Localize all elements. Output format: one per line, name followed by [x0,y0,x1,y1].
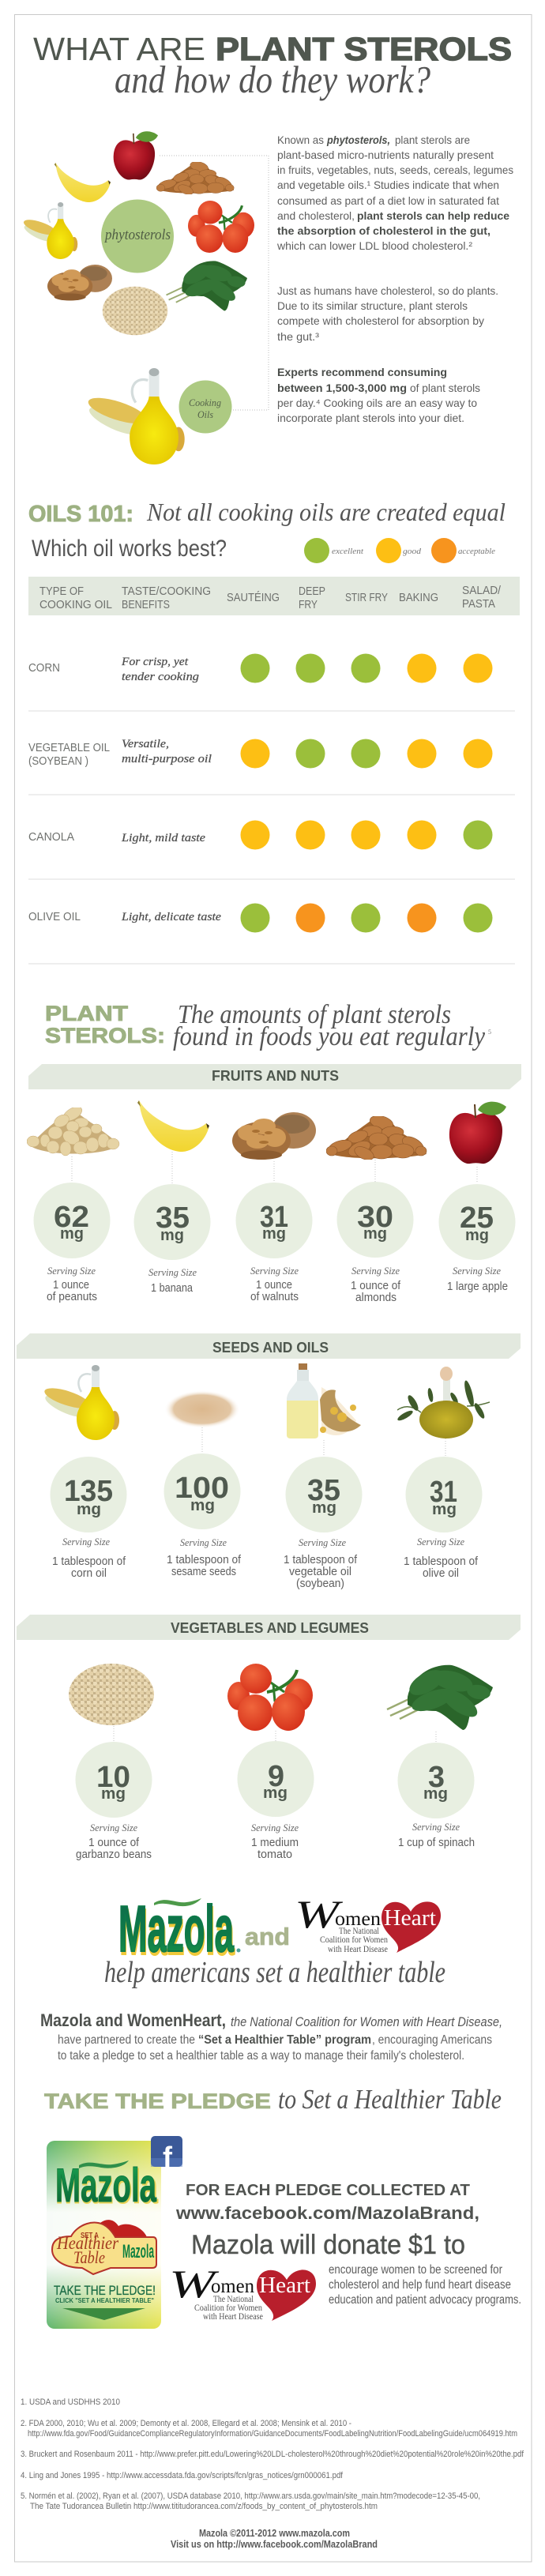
paragraph: definition [276,134,513,252]
legend: good [403,547,422,556]
heading: oils 101 [28,498,506,527]
illustration: phytosterol food sources [22,131,269,464]
item: vegetable oil: (soybean) [296,1577,344,1590]
paragraph: definition: plant-based micro-nutrients naturally present [277,149,494,161]
item: walnuts: 1 ounce [256,1278,292,1292]
title: WHAT ARE [33,31,205,67]
paragraph: definition: consumed as part of a diet low in saturated fat [277,194,499,207]
item: almonds: Serving Size [351,1265,400,1277]
heading: oils 101: OILS 101: [28,502,133,527]
heading: plant sterols amounts: 5 [488,1029,491,1036]
item: sesame seeds: Serving Size [180,1536,227,1548]
paragraph: how it works: Just as humans have cholesterol, so do plants. [277,284,498,297]
logo: WomenHeart second: W [169,2262,220,2306]
paragraph: recommendation: Experts recommend consuming [277,366,447,378]
phytosterols circle: phytosterols [103,227,171,243]
call to action: CLICK "SET A HEALTHIER TABLE" [55,2297,154,2304]
logo: WomenHeart second: The National [213,2293,254,2304]
item: walnuts: 31 [260,1201,288,1234]
text: and: and [245,1923,290,1950]
item: olive oil: Serving Size [417,1536,464,1547]
table header: SALAD/ [462,584,502,597]
icon: banana [137,1100,209,1152]
legend [304,538,495,563]
item: sesame seeds [164,1453,242,1578]
table header: BENEFITS [122,598,170,611]
paragraph: definition: and vegetable oils.¹ Studies indicate that when [277,179,499,191]
badge: set a healthier table: Healthier [56,2233,119,2253]
row: corn: For crisp, yet [121,656,189,668]
icon: apple [114,131,158,180]
text: partnership paragraph: , encouraging Americans [372,2033,492,2047]
footnotes: The Tate Tudorancea Bulletin http://www.tititudorancea.com/z/foods_by_content_of_phytosterols.htm [30,2502,378,2511]
heading: take the pledge: to Set a Healthier Table [278,2084,502,2115]
table header: SAUTÉING [227,591,280,604]
band: seeds and oils [17,1333,521,1359]
icon: chickpeas [103,287,167,335]
table header [28,577,520,615]
paragraph: definition: phytosterols, [326,134,390,146]
pledge text: FOR EACH PLEDGE COLLECTED AT [186,2182,470,2199]
logo: WomenHeart second [169,2262,316,2322]
item: tomato [237,1741,314,1861]
icon: apple [449,1102,506,1164]
logo: WomenHeart: omen [335,1908,382,1930]
icon: soybean oil [287,1363,361,1438]
item: sesame seeds: mg [190,1497,215,1514]
item: tomato: 9 [268,1760,284,1793]
item: spinach: Serving Size [412,1821,460,1833]
logo: Mazola: Mazola [119,1895,235,1969]
row: vegetable oil: multi-purpose oil [122,753,212,765]
heading: plant sterols amounts: The amounts of plant sterols [178,1000,451,1029]
item: corn oil: corn oil [71,1566,107,1580]
row: olive oil: OLIVE OIL [28,910,81,923]
paragraph: definition: Known as [277,134,324,146]
row: vegetable oil: Versatile, [122,738,169,750]
item: olive oil [404,1457,482,1580]
icon: peanuts [27,1104,119,1156]
icon: spinach [167,261,247,310]
heading: take the pledge: TAKE THE PLEDGE [44,2089,271,2113]
paragraph: definition: in fruits, vegetables, nuts, seeds, cereals, legumes [277,164,513,176]
icon: walnuts [47,265,112,300]
item: peanuts: mg [60,1225,84,1243]
text: partnership paragraph: “Set a Healthier Table” program [198,2033,371,2047]
paragraph: definition: plant sterols can help reduce [357,209,509,222]
footer [171,2527,378,2550]
band: fruits and nuts: FRUITS AND NUTS [212,1068,339,1084]
cooking oils circle [179,381,232,433]
heading: plant sterols amounts [45,1000,491,1051]
paragraph: how it works: Due to its similar structure, plant sterols [277,299,468,312]
footnotes: 2. FDA 2000, 2010; Wu et al. 2009; Demonty et al. 2008, Ellegard et al. 2008; Mensink et al. 2010 - [21,2419,351,2428]
row: olive oil [28,904,493,932]
table header: PASTA [462,597,495,611]
pledge text: www.facebook.com/MazolaBrand, [175,2203,479,2223]
row: corn [28,654,493,683]
item: almonds: 30 [357,1201,393,1234]
icon: almonds [156,160,234,197]
item: garbanzo beans: 10 [96,1761,130,1794]
table header: BAKING [399,591,438,604]
panel: seeds and oils [17,1333,521,1590]
logo: WomenHeart [295,1892,441,1954]
item: apple [439,1184,515,1293]
card: Mazola Facebook pledge [47,2136,182,2329]
item: apple: mg [465,1227,489,1244]
subheading: which oil works best: Which oil works best? [32,536,227,562]
item: vegetable oil: Serving Size [299,1536,346,1548]
row: canola: CANOLA [28,830,74,844]
footer: Mazola ©2011-2012 www.mazola.com [199,2527,350,2539]
item: spinach: 1 cup of spinach [398,1836,475,1849]
row: vegetable oil: VEGETABLE OIL [28,741,110,754]
icon: corn oil small [22,202,77,259]
logo: WomenHeart second: omen [211,2276,254,2297]
item: corn oil: 135 [64,1475,113,1508]
item: vegetable oil: mg [312,1499,336,1517]
icon: chickpeas [69,1664,154,1725]
item: tomato: 1 medium [251,1836,299,1849]
footnotes: 4. Ling and Jones 1995 - http://www.accessdata.fda.gov/scripts/fcn/gras_notices/grn000061.pdf [21,2471,344,2480]
item: vegetable oil: vegetable oil [289,1565,351,1578]
item: garbanzo beans: Serving Size [90,1822,137,1833]
text: donation purpose: cholesterol and help fund heart disease [329,2278,511,2292]
row: olive oil: Light, delicate taste [121,911,221,923]
row: corn: tender cooking [122,671,200,683]
logo: Mazola [118,1892,240,1969]
item: walnuts: Serving Size [250,1265,299,1277]
heading: plant sterols amounts: PLANT [45,1002,129,1025]
text: donation purpose [329,2263,521,2307]
badge: set a healthier table [52,2220,156,2274]
text: partnership paragraph [40,2010,502,2063]
logo: WomenHeart: The National [339,1925,380,1936]
title: PLANT STEROLS [216,31,512,67]
item: banana: mg [160,1227,184,1244]
row: corn: CORN [28,661,60,675]
title [33,31,512,101]
item: walnuts [235,1183,313,1303]
logo: Mazola small: Mazola [55,2160,158,2213]
heading: oils 101: Not all cooking oils are created equal [146,498,506,526]
table: cooking oils [28,577,520,964]
item: vegetable oil: 35 [307,1474,340,1507]
paragraph: how it works [277,284,498,343]
item: corn oil [51,1457,126,1580]
item: apple: 25 [460,1202,494,1235]
logo: WomenHeart: Coalition for Women [320,1934,388,1945]
item: banana: 35 [156,1202,190,1235]
heading: take the pledge [44,2084,502,2115]
table header: DEEP [299,585,325,598]
item: corn oil: Serving Size [62,1536,110,1547]
table header: STIR FRY [345,591,388,604]
panel: vegetables and legumes [17,1615,521,1861]
item: garbanzo beans [76,1742,152,1861]
row: canola: Light, mild taste [121,832,205,844]
icon: corn oil [43,1365,119,1440]
item: peanuts [33,1183,111,1303]
item: olive oil: mg [432,1501,457,1518]
logo: Mazola small: Mazola [55,2159,156,2212]
item: corn oil: mg [77,1501,101,1518]
paragraph: how it works: the gut.³ [277,330,319,343]
item: peanuts: 1 ounce [53,1278,89,1292]
logo: Mazola: Mazola [118,1892,234,1965]
item: spinach [398,1743,475,1849]
badge: set a healthier table: Table [73,2247,105,2267]
paragraph: how it works: compete with cholesterol for absorption by [277,314,484,327]
item: vegetable oil [284,1457,362,1590]
text: donation purpose: encourage women to be screened for [329,2263,502,2277]
item: tomato: mg [263,1784,288,1802]
icon: walnuts [232,1112,316,1160]
row: canola [28,820,493,850]
cooking oils circle: Cooking [189,397,221,408]
icon: banana [54,163,111,202]
row: vegetable oil: (SOYBEAN ) [28,754,88,768]
item: banana [134,1184,210,1295]
heading: plant sterols amounts: STEROLS: [45,1024,165,1047]
item: olive oil: olive oil [423,1566,459,1580]
item: walnuts: of walnuts [250,1290,299,1303]
icon: facebook [151,2136,182,2173]
band: vegetables and legumes [17,1615,521,1640]
footer: Visit us on http://www.facebook.com/MazolaBrand [171,2538,378,2550]
item: peanuts: of peanuts [47,1290,97,1303]
item: garbanzo beans: garbanzo beans [76,1848,152,1861]
paragraph: recommendation: incorporate plant sterols into your diet. [277,412,464,424]
paragraph: definition: the absorption of cholesterol in the gut, [277,224,490,237]
item: peanuts: 62 [54,1201,89,1234]
icon: almonds [326,1113,427,1163]
band: fruits and nuts [28,1064,521,1089]
badge: set a healthier table: Mazola [122,2241,154,2262]
icon: sesame seeds [164,1390,240,1428]
text: partnership paragraph: the National Coalition for Women with Heart Disease, [231,2014,502,2029]
icon: facebook: f [163,2141,173,2173]
item: vegetable oil: 1 tablespoon of [284,1553,358,1566]
footnotes: 5. Normén et al. (2002), Ryan et al. (2007), USDA database 2010, http://www.ars.usda.gov/main/site_main.htm?modecode=12-35-45-00, [21,2491,480,2501]
table header: TASTE/COOKING [122,585,211,598]
band: vegetables and legumes: VEGETABLES AND LEGUMES [171,1620,369,1636]
table header: TYPE OF [39,585,84,598]
footnotes: 1. USDA and USDHHS 2010 [21,2397,120,2407]
item: sesame seeds: 100 [175,1472,229,1505]
item: apple: 1 large apple [447,1280,508,1293]
arrow: down [62,2308,145,2320]
item: banana: 1 banana [151,1281,194,1295]
item: spinach: 3 [428,1761,445,1794]
legend: excellent [332,547,364,556]
paragraph: recommendation: between 1,500-3,000 mg [277,382,407,394]
legend: acceptable [458,547,495,556]
footnotes [21,2397,524,2511]
item: almonds [336,1182,414,1304]
item: peanuts: Serving Size [47,1265,96,1277]
phytosterols circle [101,199,174,273]
text: partnership paragraph: have partnered to create the [58,2033,195,2047]
item: almonds: 1 ounce of [351,1279,401,1292]
table header: FRY [299,598,318,611]
item: banana: Serving Size [148,1266,197,1278]
icon: tomatoes [227,1664,313,1731]
logo: WomenHeart second: with Heart Disease [203,2311,263,2322]
paragraph: definition: and cholesterol, [277,209,355,222]
item: sesame seeds: 1 tablespoon of [167,1553,242,1566]
text: partnership paragraph: to take a pledge to set a healthier table as a way to manage their family's cholesterol. [58,2049,464,2063]
title: and how do they work? [115,58,430,101]
item: garbanzo beans: 1 ounce of [88,1836,140,1849]
item: corn oil: 1 tablespoon of [52,1555,126,1568]
row: vegetable oil [28,738,493,768]
cooking oils circle: Oils [197,408,213,420]
logo: WomenHeart second: Coalition for Women [194,2302,262,2313]
item: olive oil: 1 tablespoon of [404,1555,479,1568]
logo: WomenHeart: Heart [384,1905,436,1931]
paragraph: definition: plant sterols are [395,134,470,146]
item: apple: Serving Size [453,1265,501,1277]
logo: WomenHeart second: Heart [259,2273,310,2298]
item: garbanzo beans: mg [101,1785,126,1803]
logo: WomenHeart: W [295,1892,344,1936]
item: almonds: almonds [355,1291,397,1304]
heading: help americans: help americans set a healthier table [104,1956,445,1989]
logo: WomenHeart: with Heart Disease [328,1943,388,1954]
call to action [54,2283,156,2304]
icon: spinach [387,1665,493,1730]
pledge text [175,2182,479,2260]
paragraph: recommendation: of plant sterols [410,382,480,394]
logo: Mazola small [55,2159,158,2213]
badge: set a healthier table: SET A [81,2232,99,2240]
heading: plant sterols amounts: found in foods you eat regularly [173,1022,486,1051]
paragraph: definition: which can lower LDL blood cholesterol.² [276,239,472,252]
text: partnership paragraph: Mazola and WomenHeart, [40,2010,226,2030]
pledge text: Mazola will donate $1 to [191,2230,465,2260]
band: seeds and oils: SEEDS AND OILS [212,1340,329,1356]
item: walnuts: mg [262,1225,286,1243]
paragraph: recommendation: per day.⁴ Cooking oils are an easy way to [277,397,477,409]
panel: fruits and nuts [27,1064,521,1304]
item: spinach: mg [423,1785,448,1803]
icon: olive oil [397,1367,490,1438]
item: olive oil: 31 [430,1476,457,1509]
item: tomato: tomato [257,1848,292,1861]
table header: COOKING OIL [39,598,112,611]
paragraph: recommendation [277,366,480,424]
item: almonds: mg [363,1225,387,1243]
item: tomato: Serving Size [251,1822,299,1833]
item: sesame seeds: sesame seeds [171,1565,236,1578]
intro text [276,134,513,424]
icon: tomatoes [188,201,254,253]
icon: corn oil large [85,368,185,464]
call to action: TAKE THE PLEDGE! [54,2283,156,2298]
